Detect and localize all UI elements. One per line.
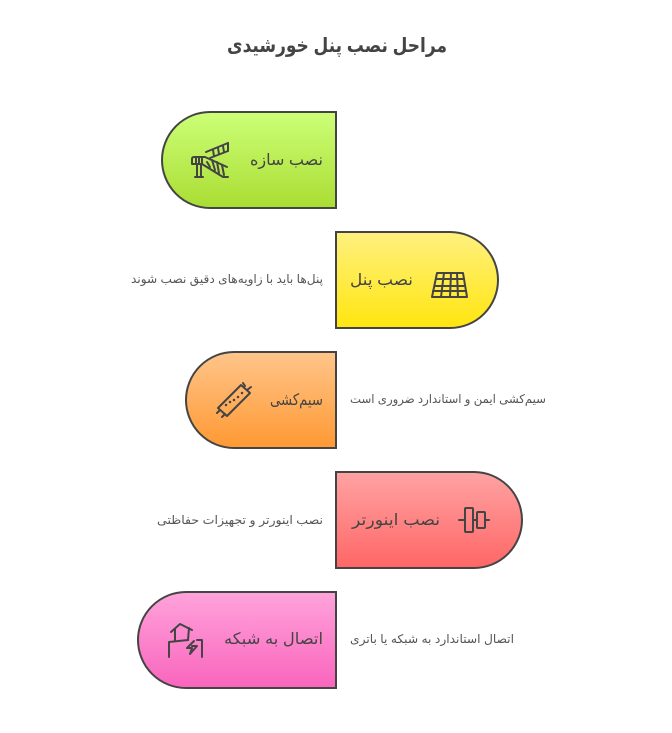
panel: step 5 shape — [138, 592, 336, 688]
panel: step 2 shape — [336, 232, 498, 328]
step 3: wiring — [186, 352, 336, 448]
caption: inverter and protection: نصب اینورتر و تجهیزات حفاظتی — [157, 513, 323, 528]
step 4: inverter — [336, 472, 522, 568]
icon: house and lightning — [169, 624, 202, 657]
panel: step 3 shape — [186, 352, 336, 448]
icon: inverter — [459, 508, 489, 532]
step 5: grid connection — [138, 592, 336, 688]
icon: structure frame — [192, 143, 228, 177]
caption: wiring safety: سیم‌کشی ایمن و استاندارد ضروری است — [350, 392, 546, 407]
caption: grid or battery: اتصال استاندارد به شبکه یا باتری — [350, 632, 514, 647]
title: مراحل نصب پنل خورشیدی — [227, 35, 447, 58]
step 3 label: سیم‌کشی — [270, 392, 323, 409]
icon: wire connector — [217, 383, 251, 417]
step 2 label: نصب پنل — [350, 272, 413, 290]
icon: solar panel — [432, 273, 467, 297]
step 4 label: نصب اینورتر — [351, 512, 440, 530]
step 1 label: نصب سازه — [250, 152, 323, 170]
panel: step 1 shape — [162, 112, 336, 208]
step 1: structure installation — [162, 112, 336, 208]
panel: step 4 shape — [336, 472, 522, 568]
step 2: panel installation — [336, 232, 498, 328]
caption: panel angle: پنل‌ها باید با زاویه‌های دقیق نصب شوند — [131, 272, 323, 287]
step 5 label: اتصال به شبکه — [224, 631, 323, 648]
